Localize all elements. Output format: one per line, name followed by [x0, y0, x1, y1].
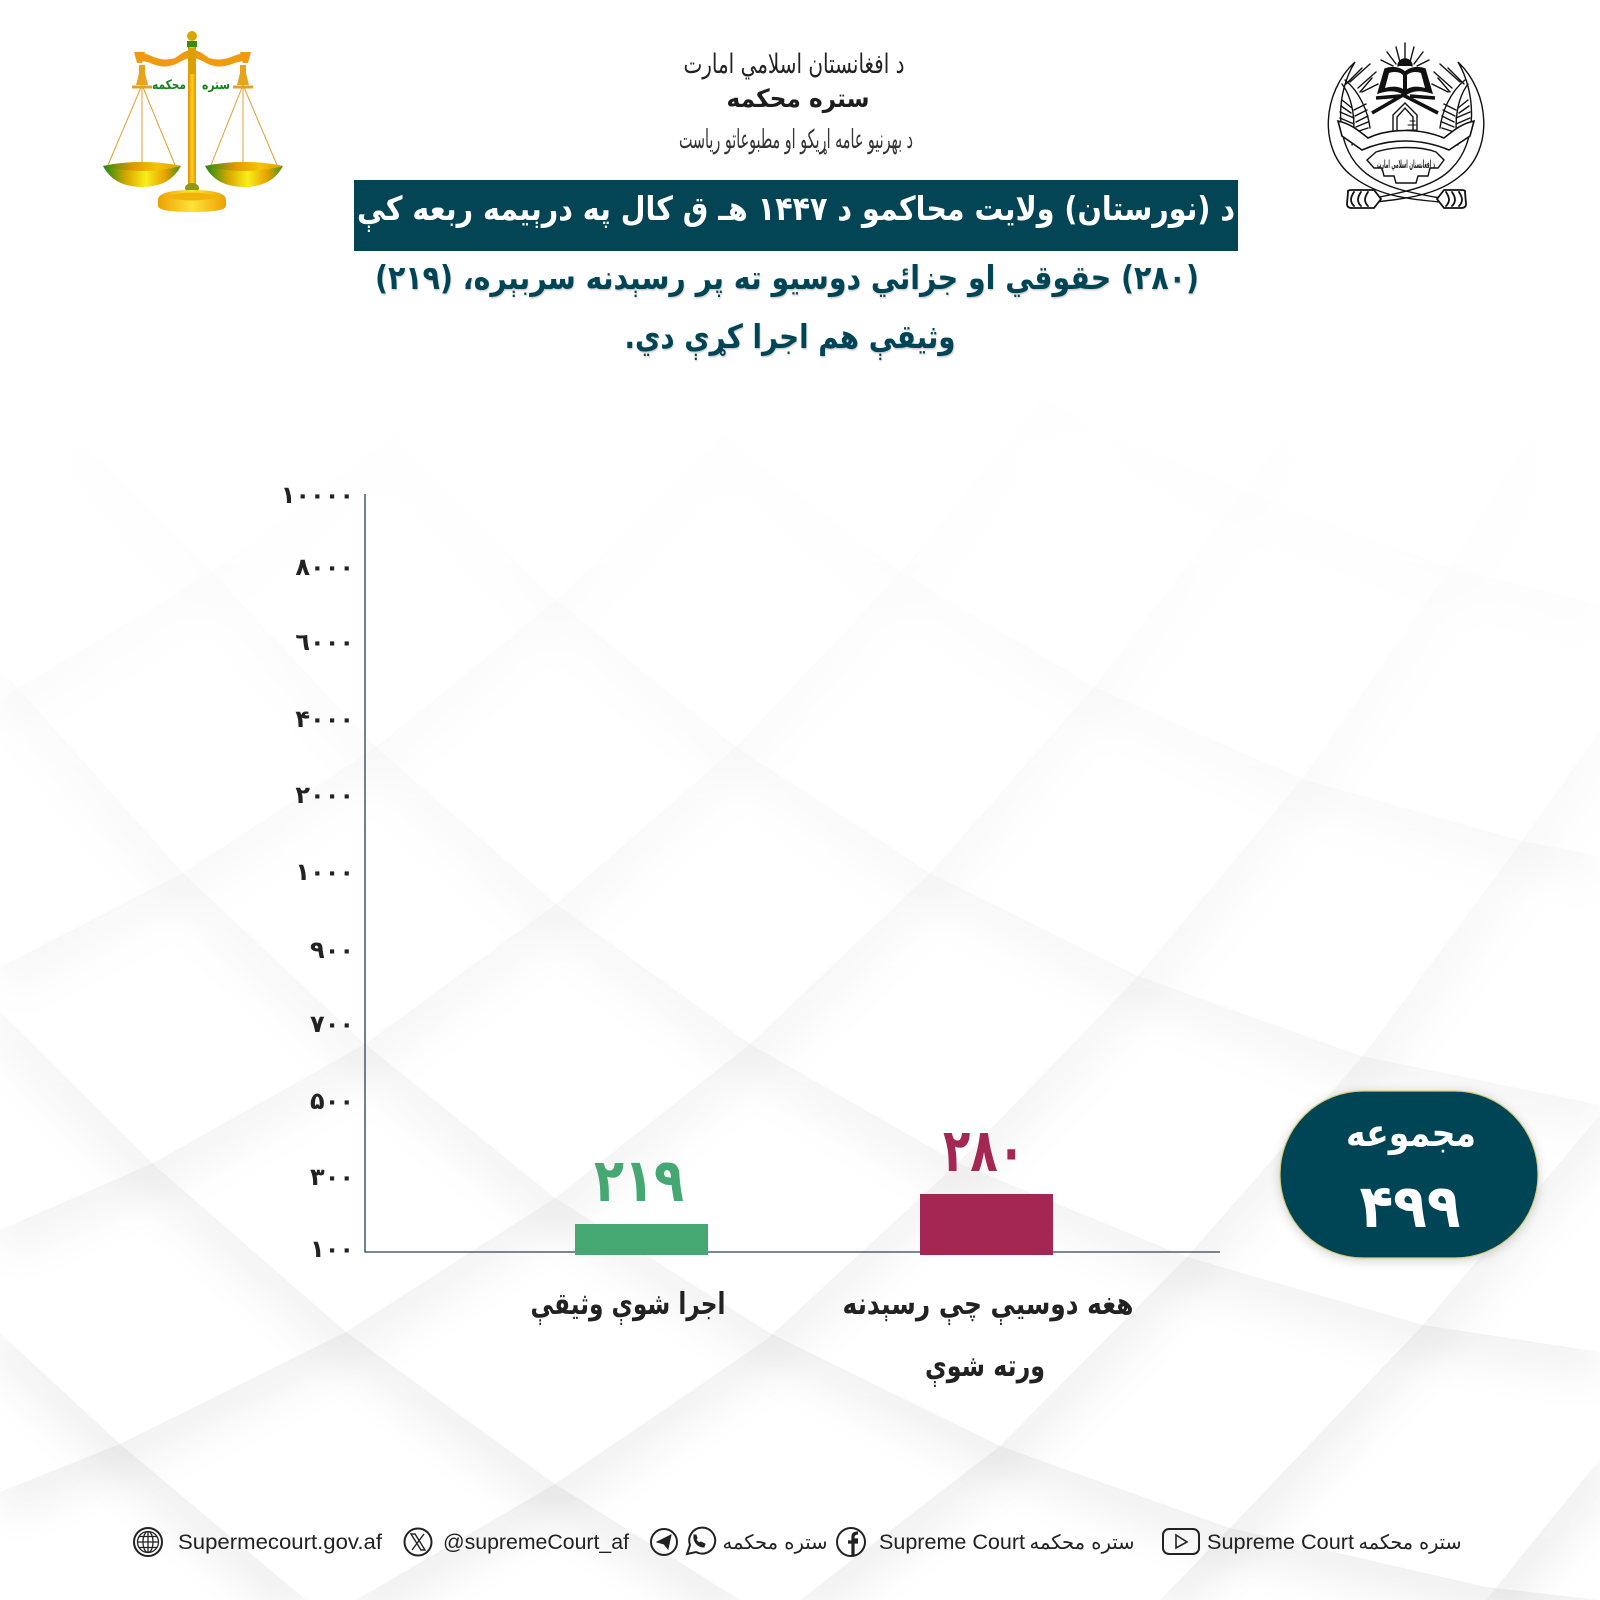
value: 280: ۲۸۰: [943, 1116, 1025, 1186]
background: white faceted pattern: [4, 841, 1600, 1600]
facebook name latin: Supreme Court: [879, 1530, 1025, 1554]
y axis labels: ۷۰۰: [310, 1010, 354, 1038]
category label: cases received: [842, 1287, 1134, 1387]
icon: X: [404, 1528, 432, 1556]
label: scales text: ستره: [202, 78, 230, 93]
emblem crescent: [1328, 62, 1440, 202]
chart axes: [365, 494, 1220, 1252]
emblem crossed stand: [1372, 95, 1438, 113]
bar chart: [281, 481, 1220, 1387]
icon: golden scales of justice logo: [103, 31, 283, 212]
emblem book: [1378, 68, 1432, 95]
total label: مجموعه: [1346, 1111, 1476, 1155]
icon: youtube: [1163, 1529, 1199, 1554]
y axis labels: ۸۰۰۰: [295, 553, 354, 581]
subtitle text: وثیقې هم اجرا کړې دي.: [624, 317, 956, 360]
title banner: [354, 180, 1238, 251]
y axis labels: ۵۰۰: [310, 1087, 354, 1115]
y axis labels: ۴۰۰۰: [295, 705, 354, 733]
website: Supermecourt.gov.af: [178, 1530, 382, 1554]
total value: ۴۹۹: [1360, 1172, 1460, 1242]
y axis labels: ۹۰۰: [310, 936, 354, 964]
calligraphy: directorate name: د بهرنیو عامه اړیکو او مطبوعاتو ریاست: [679, 125, 913, 155]
emblem wheat right: [1432, 64, 1470, 145]
emblem mihrab: [1393, 103, 1417, 130]
subtitle text: (۲۸۰) حقوقي او جزائي دوسیو ته پر رسېدنه سربېره، (۲۱۹): [375, 258, 1199, 298]
bar: executed documents 219: [575, 1224, 708, 1255]
bar: cases received 280: [920, 1194, 1053, 1255]
banner text: د (نورستان) ولایت محاکمو د ۱۴۴۷ هـ ق کال په درېیمه ربعه کې: [357, 189, 1235, 232]
category label: cases received: ورته شوې: [925, 1349, 1045, 1387]
y axis labels: ۳۰۰: [310, 1163, 354, 1191]
y axis labels: ۱۰۰۰: [295, 858, 354, 886]
y axis labels: ۱۰۰۰۰: [281, 481, 354, 509]
label: scales text: محکمه: [152, 78, 186, 93]
icon: globe: [134, 1528, 162, 1556]
icon: national emblem: د افغانستان اسلامي امارت: [1377, 158, 1435, 171]
emblem gear and motto: [1367, 148, 1444, 183]
category label: executed documents: اجرا شوې وثیقې: [530, 1287, 726, 1325]
y axis labels: ٦۰۰۰: [295, 628, 354, 656]
y axis labels: ۲۰۰۰: [295, 781, 354, 809]
value: 219: ۲۱۹: [594, 1146, 684, 1216]
icon: national emblem: [1328, 43, 1484, 208]
category label: cases received: هغه دوسیې چې رسېدنه: [842, 1287, 1134, 1325]
emblem ribbon banner: [1338, 121, 1474, 150]
y axis labels: ۱۰۰: [310, 1235, 354, 1263]
callout: total: [1280, 1091, 1538, 1258]
X handle: @supremeCourt_af: [443, 1530, 629, 1554]
header: institution names: [679, 49, 913, 155]
y axis labels: [281, 481, 354, 1263]
emblem left ribbon end: [1347, 190, 1381, 208]
icon: facebook: [837, 1528, 865, 1556]
facebook name pashto: ستره محکمه: [1030, 1530, 1134, 1554]
youtube name latin: Supreme Court: [1207, 1530, 1354, 1554]
icon: telegram: [651, 1529, 677, 1555]
youtube name pashto: ستره محکمه: [1358, 1530, 1462, 1554]
emblem rays: [1381, 43, 1429, 66]
emblem right ribbon end: [1437, 190, 1466, 208]
emblem wheat left: [1340, 64, 1378, 145]
whatsapp telegram name: ستره محکمه: [722, 1530, 828, 1554]
icon: whatsapp: [687, 1528, 715, 1554]
footer: contact links: [134, 1528, 1462, 1556]
subtitle text: [375, 258, 1199, 360]
calligraphy: Islamic Emirate of Afghanistan: د افغانستان اسلامي امارت: [684, 49, 904, 80]
heading: Supreme Court: ستره محکمه: [726, 84, 870, 114]
label: scales text: [152, 78, 230, 93]
